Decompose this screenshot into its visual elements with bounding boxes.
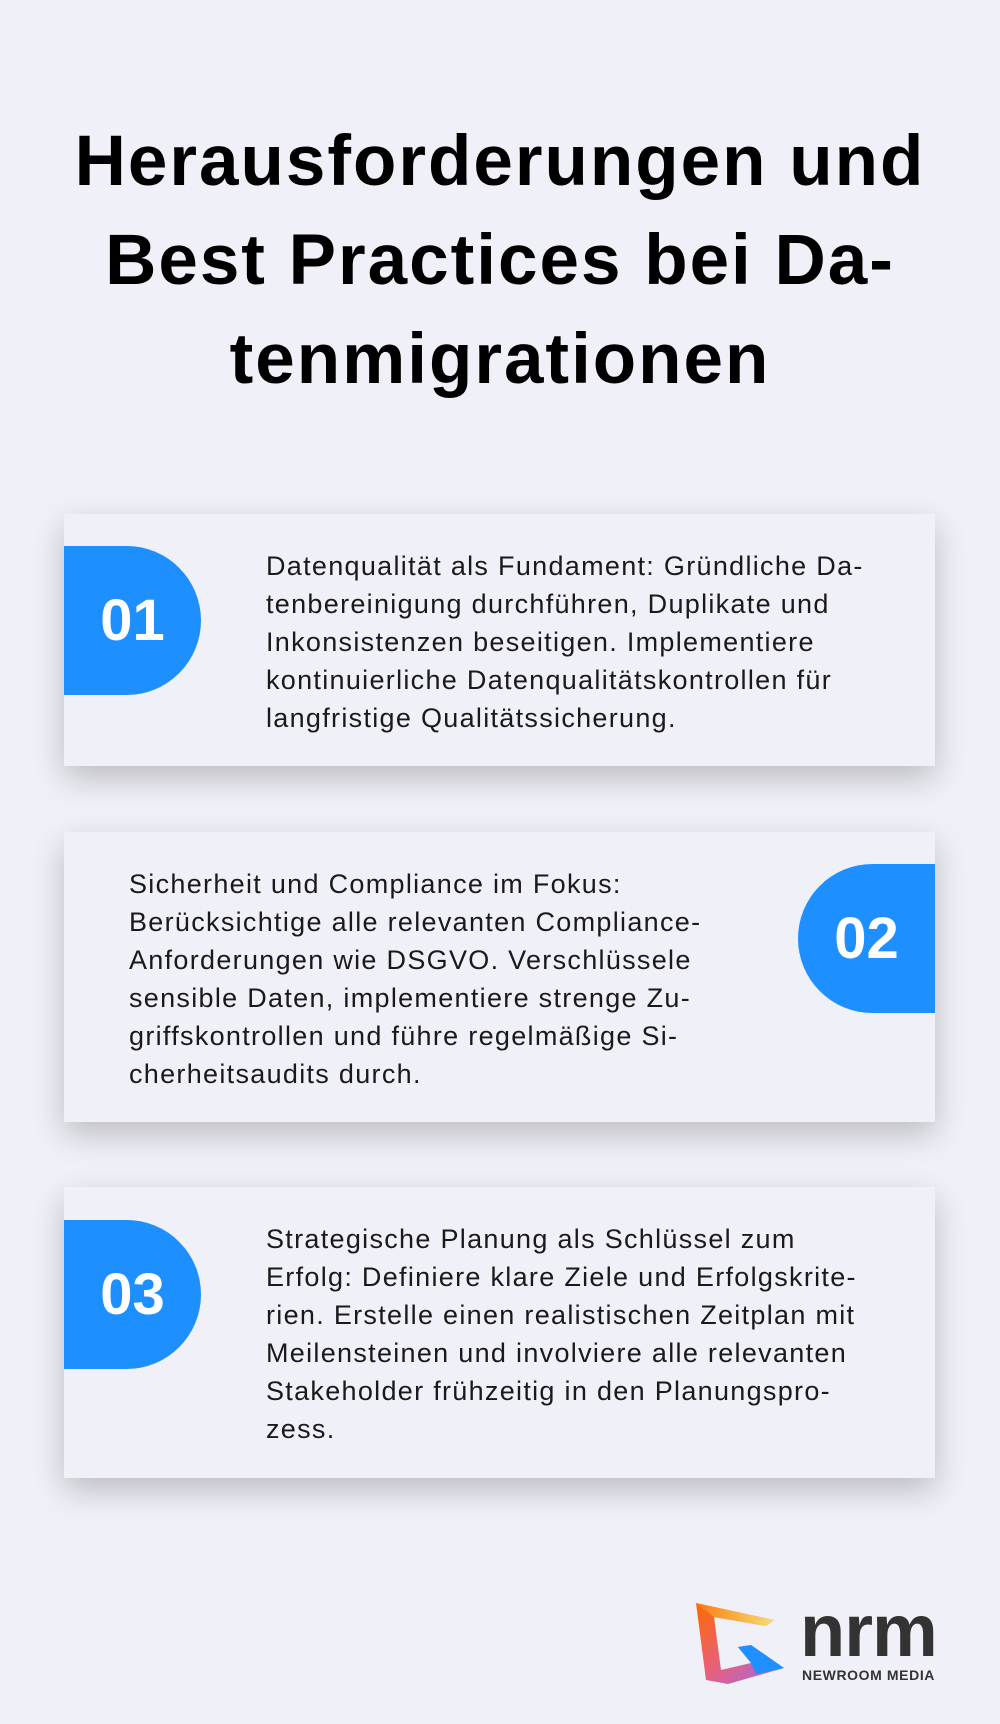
logo: NEWROOM MEDIA xyxy=(802,1667,935,1683)
title: Herausforderungen und xyxy=(75,122,925,201)
logo text: nrm xyxy=(800,1589,937,1672)
text block 2 xyxy=(129,869,701,1089)
text block 2: sensible Daten, implementiere strenge Zu- xyxy=(129,983,691,1013)
title xyxy=(75,122,925,399)
title: Best Practices bei Da- xyxy=(105,221,895,300)
badge 02 xyxy=(798,864,935,1013)
text block 1 xyxy=(266,551,864,733)
text block 1: tenbereinigung durchführen, Duplikate und xyxy=(266,589,830,619)
panel: card 2 xyxy=(64,832,935,1122)
badge 01: 01 xyxy=(100,588,165,653)
text block 3: rien. Erstelle einen realistischen Zeitplan mit xyxy=(266,1300,855,1330)
text block 1: langfristige Qualitätssicherung. xyxy=(266,703,677,733)
text block 3: Stakeholder frühzeitig in den Planungspro- xyxy=(266,1376,831,1406)
text block 2: cherheitsaudits durch. xyxy=(129,1059,422,1089)
logo xyxy=(696,1589,937,1684)
text block 3 xyxy=(266,1224,857,1444)
text block 1: kontinuierliche Datenqualitätskontrollen für xyxy=(266,665,832,695)
text block 1: Datenqualität als Fundament: Gründliche Da- xyxy=(266,551,864,581)
text block 2: Anforderungen wie DSGVO. Verschlüssele xyxy=(129,945,692,975)
badge 01 xyxy=(64,546,201,695)
badge 03: 03 xyxy=(100,1262,165,1327)
icon: logo mark xyxy=(696,1603,784,1684)
badge 02: 02 xyxy=(834,906,899,971)
text block 3: Meilensteinen und involviere alle relevanten xyxy=(266,1338,847,1368)
text block 3: Erfolg: Definiere klare Ziele und Erfolgskrite- xyxy=(266,1262,857,1292)
badge 03 xyxy=(64,1220,201,1369)
text block 3: zess. xyxy=(266,1414,336,1444)
text block 2: Sicherheit und Compliance im Fokus: xyxy=(129,869,622,899)
text block 1: Inkonsistenzen beseitigen. Implementiere xyxy=(266,627,815,657)
text block 3: Strategische Planung als Schlüssel zum xyxy=(266,1224,796,1254)
title: tenmigrationen xyxy=(230,320,770,399)
panel: card 1 xyxy=(64,514,935,766)
text block 2: Berücksichtige alle relevanten Compliance- xyxy=(129,907,701,937)
panel: card 3 xyxy=(64,1187,935,1478)
text block 2: griffskontrollen und führe regelmäßige Si- xyxy=(129,1021,678,1051)
